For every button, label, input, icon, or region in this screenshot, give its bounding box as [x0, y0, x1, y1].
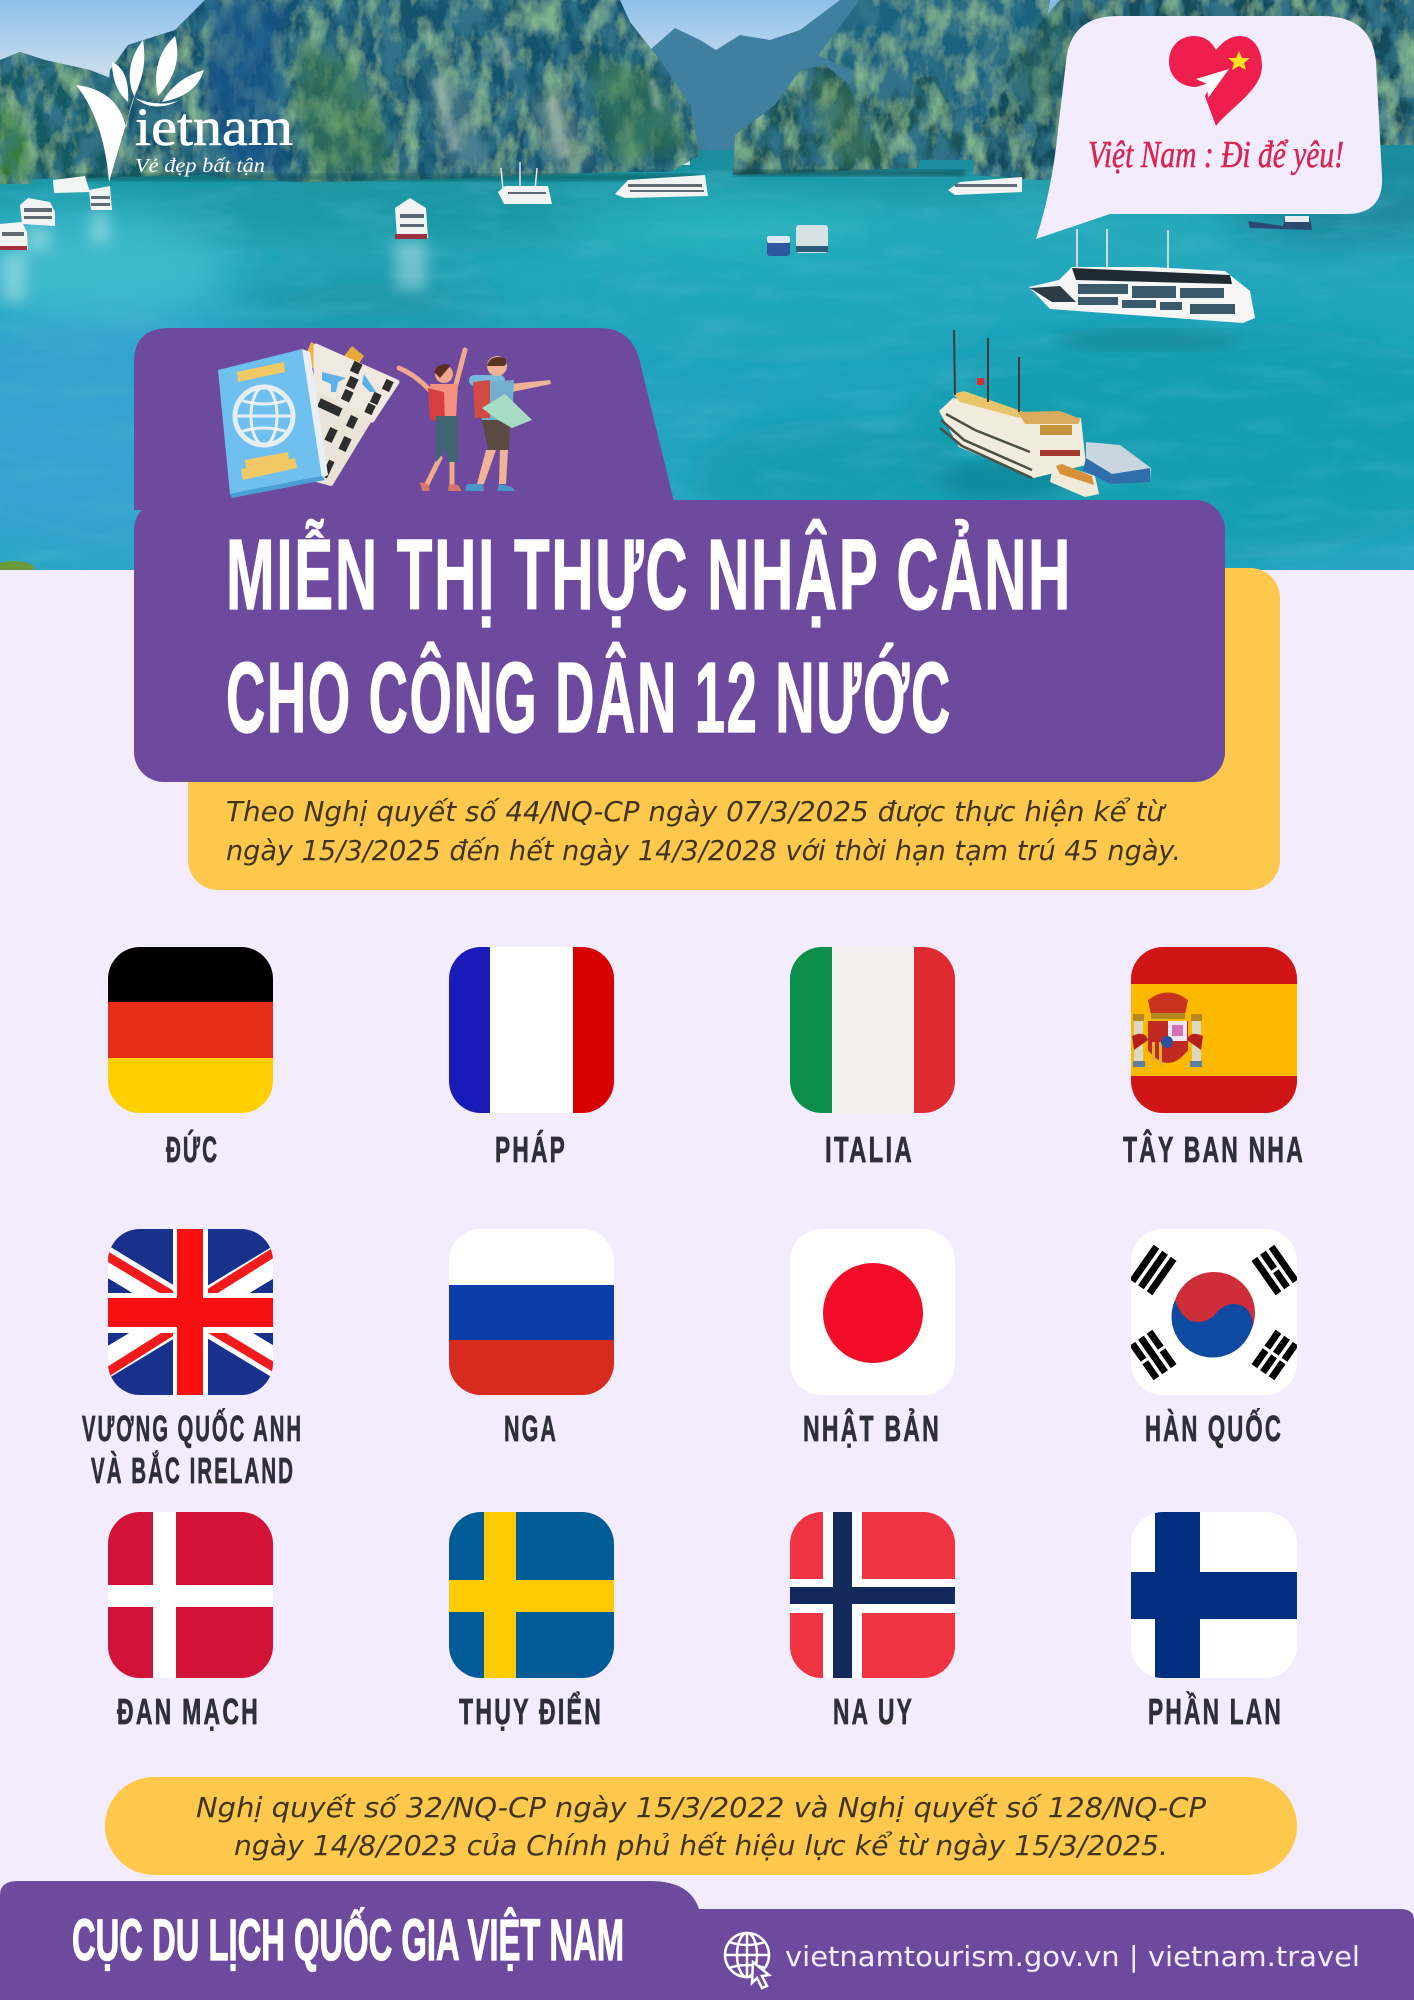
- label: Norway: NA UY: [833, 1691, 914, 1732]
- limestone karsts: [0, 0, 1414, 184]
- pale rock streaks: [434, 36, 660, 160]
- footer band: [0, 1881, 1414, 2000]
- flag: United Kingdom: [108, 1229, 273, 1395]
- label: United Kingdom and Northern Ireland: VƯƠNG QUỐC ANH: [82, 1407, 303, 1449]
- label: United Kingdom and Northern Ireland: [82, 1407, 303, 1491]
- bottom note: Nghị quyết số 32/NQ-CP ngày 15/3/2022 và Nghị quyết số 128/NQ-CP: [196, 1791, 1206, 1824]
- logo: Vietnam: [76, 36, 293, 182]
- intro text: ngày 15/3/2025 đến hết ngày 14/3/2028 với thời hạn tạm trú 45 ngày.: [226, 834, 1181, 867]
- icon: globe with cursor: [725, 1933, 769, 1988]
- label: Germany: ĐỨC: [166, 1128, 219, 1170]
- wordmark: ietnam: [135, 97, 293, 157]
- shoreline shadow: [60, 174, 700, 181]
- small boats centre: [767, 242, 790, 256]
- hero photo: Ha Long Bay: [0, 0, 1414, 575]
- speech bubble: slogan: [1036, 16, 1382, 239]
- lotus petals: [112, 36, 204, 107]
- footer websites: vietnamtourism.gov.vn | vietnam.travel: [785, 1940, 1360, 1973]
- man: [510, 380, 551, 392]
- woman: [399, 350, 465, 486]
- cruise ship 1: [1029, 267, 1255, 323]
- bottom note: ngày 14/8/2023 của Chính phủ hết hiệu lực kể từ ngày 15/3/2025.: [234, 1829, 1168, 1862]
- label: France: PHÁP: [495, 1129, 567, 1170]
- cliff colour masses: [0, 0, 1070, 178]
- slogan text: Việt Nam : Đi để yêu!: [1088, 134, 1344, 176]
- purple tab behind icons: [134, 328, 676, 540]
- tagline: Vẻ đẹp bất tận: [135, 155, 265, 177]
- label: Italy: ITALIA: [825, 1129, 914, 1170]
- intro text: Theo Nghị quyết số 44/NQ-CP ngày 07/3/2025 được thực hiện kể từ: [226, 795, 1167, 828]
- small ships left: [0, 175, 1022, 250]
- flag: Denmark: [108, 1512, 274, 1678]
- flag: Russia: [449, 1229, 615, 1395]
- flag: Finland: [1131, 1512, 1297, 1678]
- label: South Korea: HÀN QUỐC: [1145, 1407, 1283, 1449]
- flag: France: [449, 947, 615, 1113]
- label: Spain: TÂY BAN NHA: [1123, 1128, 1305, 1170]
- purple title panel: [134, 328, 1225, 782]
- flag: Norway: [790, 1512, 956, 1678]
- flag: Sweden: [449, 1512, 615, 1678]
- flag: Japan: [790, 1229, 956, 1395]
- flag: Italy: [790, 947, 956, 1113]
- label: Russia: NGA: [504, 1408, 558, 1449]
- label: Finland: PHẦN LAN: [1148, 1691, 1283, 1732]
- title: [226, 518, 1072, 754]
- label: Denmark: ĐAN MẠCH: [117, 1691, 260, 1732]
- flag: South Korea: [1129, 1229, 1299, 1395]
- flag: Spain: [1131, 947, 1297, 1113]
- intro text: [226, 795, 1181, 867]
- V swoosh: [76, 85, 136, 182]
- yellow intro panel: [188, 568, 1280, 890]
- icon: two travellers: [399, 350, 551, 491]
- label: Japan: NHẬT BẢN: [803, 1407, 941, 1449]
- cruise ship 2: [940, 460, 1080, 500]
- distant blue mountains: [651, 0, 860, 150]
- bottom note: [105, 1777, 1297, 1875]
- footer organisation name: CỤC DU LỊCH QUỐC GIA VIỆT NAM: [72, 1908, 624, 1973]
- foliage lower left: [0, 561, 34, 575]
- label: United Kingdom and Northern Ireland: VÀ BẮC IRELAND: [91, 1449, 295, 1491]
- icon: passport and tickets: [218, 342, 397, 498]
- reflections: [2, 212, 427, 302]
- flag: Germany: [108, 947, 274, 1113]
- label: Sweden: THỤY ĐIỂN: [459, 1690, 603, 1732]
- icon: heart with paper plane: [1169, 36, 1262, 126]
